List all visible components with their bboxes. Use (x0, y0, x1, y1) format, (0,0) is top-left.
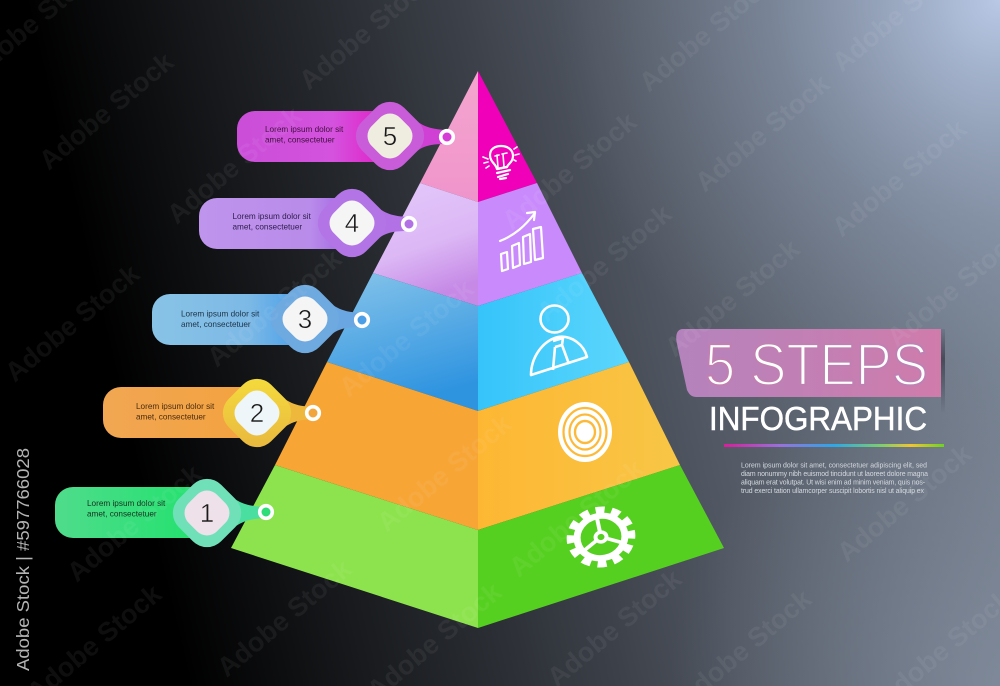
icon: gear (566, 504, 636, 570)
label 3 number: 3 (298, 304, 312, 334)
watermark pattern: Adobe Stock (333, 273, 480, 403)
watermark pattern: Adobe Stock (659, 233, 806, 363)
label 5 pin (441, 131, 453, 143)
label 5 (237, 94, 453, 178)
layer 2 right face (478, 362, 680, 530)
label 5 text: Lorem ipsum dolor sit (265, 125, 344, 134)
icon: target (558, 402, 612, 462)
description paragraph: diam nonummy nibh euismod tincidunt ut laoreet dolore magna (741, 471, 928, 478)
watermark pattern: Adobe Stock (531, 198, 678, 328)
layer 3 left face (327, 273, 478, 411)
label 5 diamond (348, 94, 432, 178)
icon: light bulb (483, 146, 519, 179)
watermark pattern: Adobe Stock (496, 106, 643, 236)
label 5 number: 5 (383, 121, 397, 151)
watermark pattern: Adobe Stock (0, 258, 146, 388)
title: 5 STEPS: 5 STEPS (705, 332, 928, 398)
watermark pattern: Adobe Stock (831, 438, 978, 568)
title: INFOGRAPHIC: INFOGRAPHIC (709, 400, 927, 437)
watermark pattern: Adobe Stock (826, 113, 973, 243)
stock id text: Adobe Stock | #597766028 (13, 448, 33, 671)
layer 4 left face (373, 183, 478, 306)
rainbow rule (724, 444, 944, 447)
layer 4 right face (478, 183, 582, 306)
label 1 (55, 471, 272, 555)
watermark pattern: Adobe Stock (689, 68, 836, 198)
label 3 diamond (263, 277, 347, 361)
label 1 text: amet, consectetuer (87, 510, 157, 518)
watermark pattern: Adobe Stock (33, 46, 180, 176)
label 4 number: 4 (345, 208, 359, 238)
label 3 pin (356, 314, 368, 326)
label 3 connector (322, 295, 362, 343)
label 5 pill (237, 111, 397, 162)
pyramid (231, 71, 724, 628)
label 1 pin (260, 506, 272, 518)
layer 5 left face (420, 71, 478, 202)
label 2 (103, 371, 319, 455)
label 3 (152, 277, 368, 361)
label 2 connector (274, 389, 313, 437)
layer 2 left face (275, 362, 478, 530)
layer 1 left face (231, 465, 478, 628)
watermark pattern: Adobe Stock (61, 458, 208, 588)
label 4 text: amet, consectetuer (232, 222, 302, 232)
label 3 text: amet, consectetuer (181, 320, 251, 329)
label 2 number: 2 (250, 398, 264, 428)
label 4 pin (403, 218, 415, 230)
description paragraph: Lorem ipsum dolor sit amet, consectetuer adipiscing elit, sed (741, 462, 927, 470)
label 2 text: Lorem ipsum dolor sit (136, 402, 215, 411)
label 4 pill (199, 198, 359, 249)
icon: growth chart (500, 212, 543, 271)
label 3 text: Lorem ipsum dolor sit (181, 310, 260, 318)
label 5 text: amet, consectetuer (265, 136, 335, 144)
label 4 diamond (310, 181, 394, 265)
label 1 diamond (165, 471, 249, 555)
title ribbon (676, 329, 945, 414)
label 5 connector (407, 112, 447, 160)
layer 3 right face (478, 273, 629, 411)
label 2 diamond (215, 371, 299, 455)
layer 1 right face (478, 465, 724, 628)
label 1 pill (55, 487, 215, 538)
watermark pattern: Adobe Stock (211, 553, 358, 683)
label 1 connector (224, 489, 266, 537)
label 1 number: 1 (200, 498, 214, 528)
label 4 (199, 181, 415, 265)
watermark pattern: Adobe Stock (201, 243, 348, 373)
watermark pattern: Adobe Stock (371, 408, 518, 538)
layer 5 right face (478, 71, 537, 202)
label 4 text: Lorem ipsum dolor sit (232, 212, 311, 221)
icon: businessman (531, 306, 587, 375)
label 3 pill (152, 294, 312, 345)
label 2 pin (307, 407, 319, 419)
label 1 text: Lorem ipsum dolor sit (87, 499, 166, 508)
label 2 pill (103, 387, 263, 438)
watermark pattern: Adobe Stock (161, 100, 308, 230)
description paragraph: trud exerci tation ullamcorper suscipit lobortis nisl ut aliquip ex (741, 488, 925, 495)
label 2 text: amet, consectetuer (136, 412, 206, 422)
label 4 connector (369, 199, 409, 247)
watermark pattern: Adobe Stock (503, 453, 650, 583)
description paragraph: aliquam erat volutpat. Ut wisi enim ad minim veniam, quis nos- (741, 480, 925, 486)
